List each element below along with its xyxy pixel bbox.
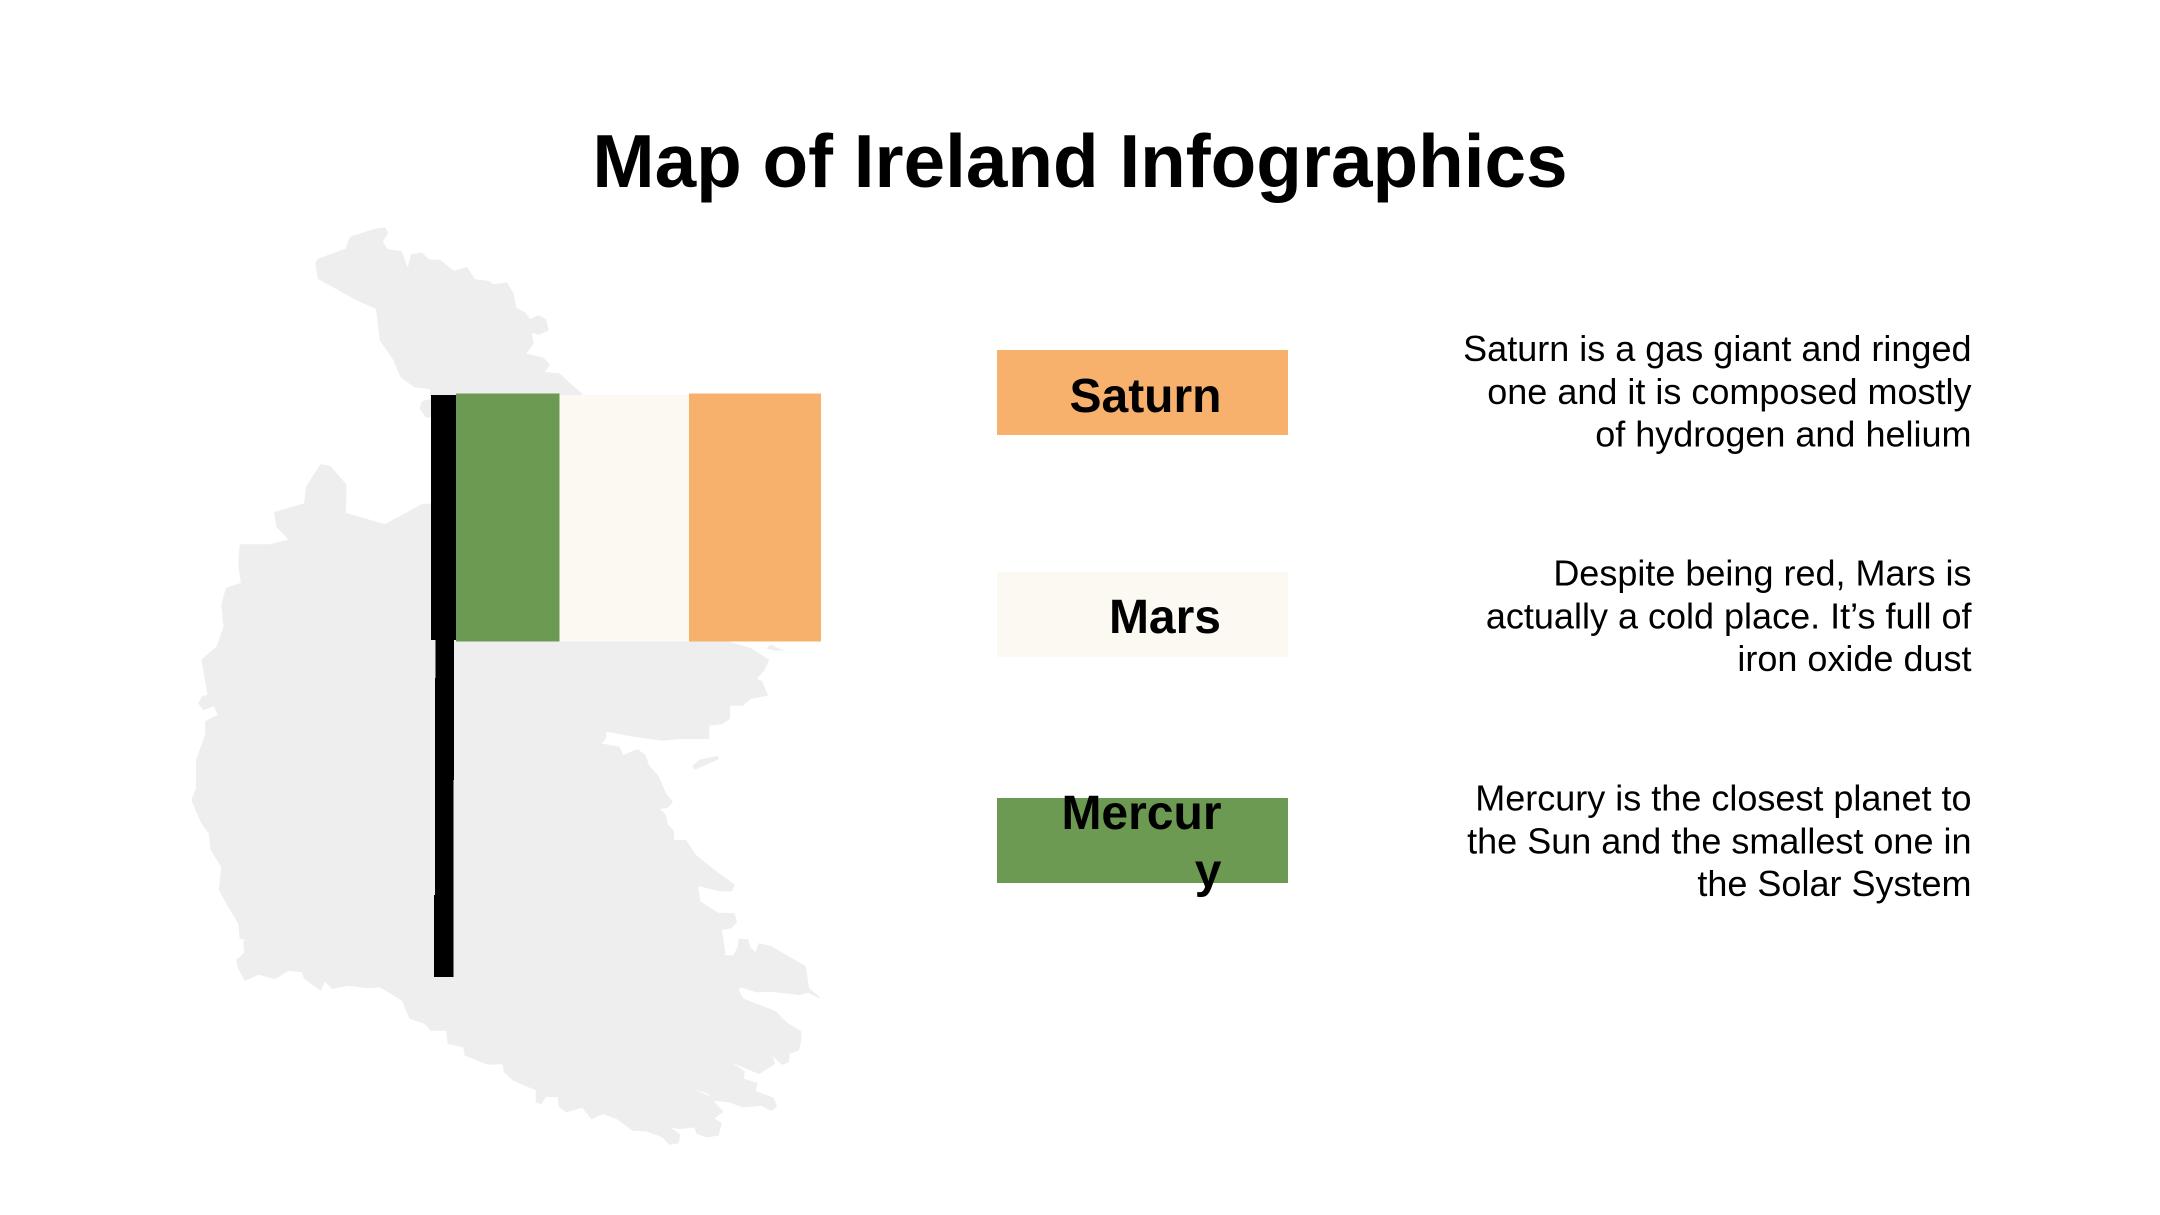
description: Mars: actually a cold place. It’s full of: [1486, 596, 1972, 636]
flag stripe: green: [456, 394, 560, 642]
label box: Mars: [997, 572, 1288, 657]
description: Saturn: Saturn is a gas giant and ringed: [1463, 328, 1972, 369]
description: Mercury: the Solar System: [1697, 863, 1972, 904]
panel: Mercury: [997, 778, 1972, 904]
description: Saturn: of hydrogen and helium: [1595, 414, 1972, 454]
flag pole: [431, 395, 456, 977]
flag stripe: white: [560, 395, 689, 642]
description: Saturn: one and it is composed mostly: [1487, 371, 1972, 412]
title: Map of Ireland Infographics: [592, 119, 1568, 203]
label: Mercury: y: [1195, 845, 1222, 898]
label box: Mercury: [997, 798, 1288, 883]
description: Mercury: the Sun and the smallest one in: [1467, 820, 1972, 862]
label: Mercury: Mercur: [1061, 787, 1222, 840]
label box: Saturn: [997, 350, 1288, 435]
panel: Mars: [997, 552, 1972, 679]
panel: Saturn: [997, 328, 1972, 454]
map of Ireland: [192, 228, 819, 1144]
flag stripe: orange: [689, 394, 821, 642]
label: Mars: Mars: [1109, 591, 1221, 644]
description: Mercury: Mercury is the closest planet to: [1475, 778, 1972, 818]
label: Saturn: Saturn: [1069, 370, 1222, 423]
flag of Ireland: [431, 394, 821, 977]
description: Mars: iron oxide dust: [1737, 638, 1972, 679]
description: Mars: Despite being red, Mars is: [1553, 552, 1972, 594]
